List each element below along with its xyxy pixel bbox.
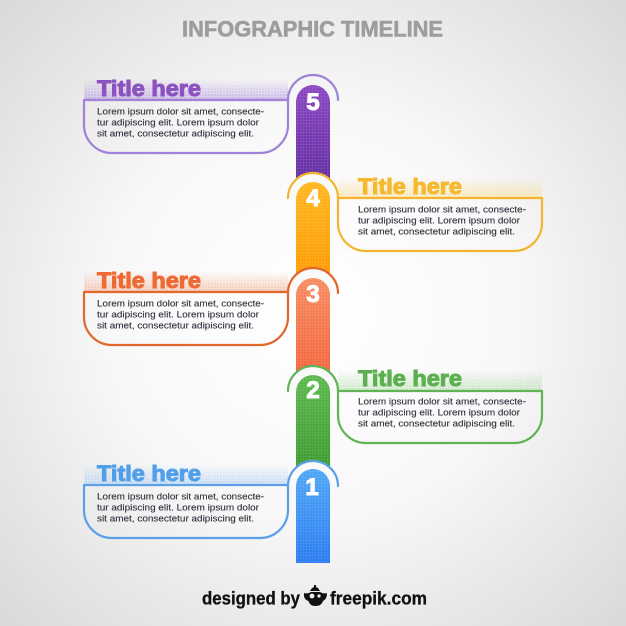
body text 1: tur adipiscing elit. Lorem ipsum dolor: [97, 502, 259, 512]
text box 2: [338, 391, 542, 443]
halftone band 5: [84, 82, 288, 99]
halftone band 3: [84, 274, 288, 291]
body text 4: sit amet, consectetur adipiscing elit.: [358, 226, 515, 236]
step 4: yellow: [288, 173, 542, 285]
number 3: 3: [306, 281, 320, 308]
column segment 2: [296, 375, 330, 475]
arc 2: [288, 366, 338, 391]
step 5: purple: [84, 75, 338, 190]
body text 2: sit amet, consectetur adipiscing elit.: [358, 418, 515, 428]
title: INFOGRAPHIC TIMELINE: [182, 16, 443, 42]
number 5: 5: [306, 89, 320, 116]
arc mask 3: [288, 269, 338, 294]
arc 5: [288, 75, 338, 100]
icon: freepik mascot: [304, 585, 327, 606]
heading 5: Title here: [97, 76, 201, 101]
body text 3: [97, 298, 264, 330]
step 2: green: [288, 366, 542, 475]
body text 5: sit amet, consectetur adipiscing elit.: [97, 128, 254, 138]
body text 1: [97, 492, 264, 524]
heading 3: Title here: [97, 268, 201, 293]
body text 3: tur adipiscing elit. Lorem ipsum dolor: [97, 310, 259, 320]
heading 2: Title here: [358, 366, 462, 391]
body text 2: Lorem ipsum dolor sit amet, consecte-: [358, 396, 526, 406]
arc 1: [288, 461, 338, 486]
body text 2: tur adipiscing elit. Lorem ipsum dolor: [358, 408, 520, 418]
heading 1: Title here: [97, 461, 201, 486]
text box 1: [84, 485, 288, 538]
column segment 1: [296, 469, 330, 563]
text box 4: [338, 198, 542, 251]
step 1: blue: [84, 461, 338, 563]
body text 5: Lorem ipsum dolor sit amet, consecte-: [97, 106, 264, 116]
arc 4: [288, 173, 338, 198]
number 2: 2: [306, 377, 320, 404]
column segment 3: [296, 278, 330, 380]
body text 1: sit amet, consectetur adipiscing elit.: [97, 514, 254, 524]
arc mask 4: [288, 173, 338, 198]
body text 4: tur adipiscing elit. Lorem ipsum dolor: [358, 216, 520, 226]
body text 2: [358, 396, 526, 428]
text box 5: [84, 100, 288, 153]
footer credit: [202, 585, 427, 608]
halftone band 1: [84, 467, 288, 484]
heading 4: Title here: [358, 174, 462, 199]
body text 3: sit amet, consectetur adipiscing elit.: [97, 320, 254, 330]
halftone band 4: [338, 180, 542, 197]
column segment 5: [296, 85, 330, 190]
body text 5: tur adipiscing elit. Lorem ipsum dolor: [97, 118, 259, 128]
footer text left: designed by: [202, 588, 300, 608]
halftone band 2: [338, 373, 542, 390]
arc mask 1: [288, 461, 338, 486]
number 1: 1: [305, 474, 319, 501]
footer text right: freepik.com: [330, 588, 427, 608]
body text 5: [97, 106, 264, 138]
arc 3: [288, 268, 338, 293]
body text 4: Lorem ipsum dolor sit amet, consecte-: [358, 204, 526, 214]
arc mask 2: [288, 366, 338, 391]
number 4: 4: [306, 185, 320, 212]
step 3: orange: [84, 268, 338, 380]
body text 3: Lorem ipsum dolor sit amet, consecte-: [97, 298, 264, 308]
body text 1: Lorem ipsum dolor sit amet, consecte-: [97, 492, 264, 502]
body text 4: [358, 204, 526, 236]
column segment 4: [296, 182, 330, 285]
text box 3: [84, 292, 288, 345]
